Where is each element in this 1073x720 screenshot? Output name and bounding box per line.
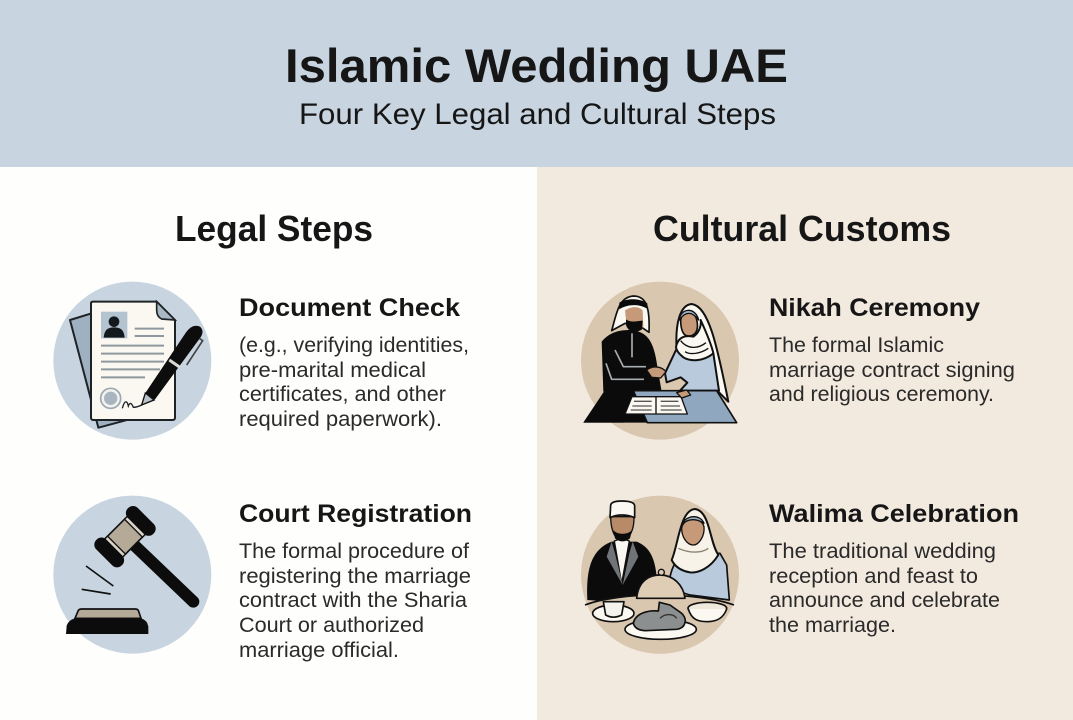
heading: Cultural Customs: Cultural Customs bbox=[653, 208, 951, 249]
text: Nikah Ceremony description: marriage contract signing bbox=[769, 359, 1015, 382]
icon: gavel bbox=[53, 496, 211, 654]
text: Walima Celebration description: The traditional wedding bbox=[769, 540, 996, 563]
text: Court Registration description bbox=[239, 540, 471, 662]
text: Court Registration description: Court or authorized bbox=[239, 614, 424, 637]
text: Court Registration description: marriage official. bbox=[239, 639, 399, 662]
text: Nikah Ceremony description: and religious ceremony. bbox=[769, 383, 994, 406]
text: Nikah Ceremony description: The formal Islamic bbox=[769, 334, 944, 357]
text: Document Check description bbox=[239, 334, 469, 431]
text: Walima Celebration description: reception and feast to bbox=[769, 565, 978, 588]
text: Court Registration description: registering the marriage bbox=[239, 565, 471, 588]
text: Document Check description: (e.g., verifying identities, bbox=[239, 334, 469, 357]
icon: document and pen bbox=[53, 282, 211, 440]
text: Walima Celebration description: announce and celebrate bbox=[769, 589, 1000, 612]
heading: Court Registration: Court Registration bbox=[239, 500, 472, 528]
text: Document Check description: certificates, and other bbox=[239, 383, 446, 406]
title: Islamic Wedding UAE bbox=[285, 39, 788, 92]
heading: Nikah Ceremony: Nikah Ceremony bbox=[769, 294, 980, 322]
text: Walima Celebration description: the marriage. bbox=[769, 614, 896, 637]
icon: nikah ceremony couple bbox=[581, 282, 739, 440]
heading: Document Check: Document Check bbox=[239, 294, 460, 322]
header band bbox=[0, 0, 1073, 167]
icon: walima celebration bbox=[581, 496, 739, 654]
panel: left legal background bbox=[0, 167, 537, 720]
text: Court Registration description: The formal procedure of bbox=[239, 540, 469, 563]
text: Court Registration description: contract with the Sharia bbox=[239, 589, 467, 612]
text: Document Check description: pre-marital medical bbox=[239, 359, 426, 382]
text: Document Check description: required paperwork). bbox=[239, 408, 442, 431]
text: Walima Celebration description bbox=[769, 540, 1000, 637]
panel: right cultural background bbox=[537, 167, 1073, 720]
heading: Legal Steps: Legal Steps bbox=[175, 208, 373, 249]
heading: Walima Celebration: Walima Celebration bbox=[769, 500, 1019, 528]
subtitle: Four Key Legal and Cultural Steps bbox=[299, 98, 776, 131]
text: Nikah Ceremony description bbox=[769, 334, 1015, 406]
